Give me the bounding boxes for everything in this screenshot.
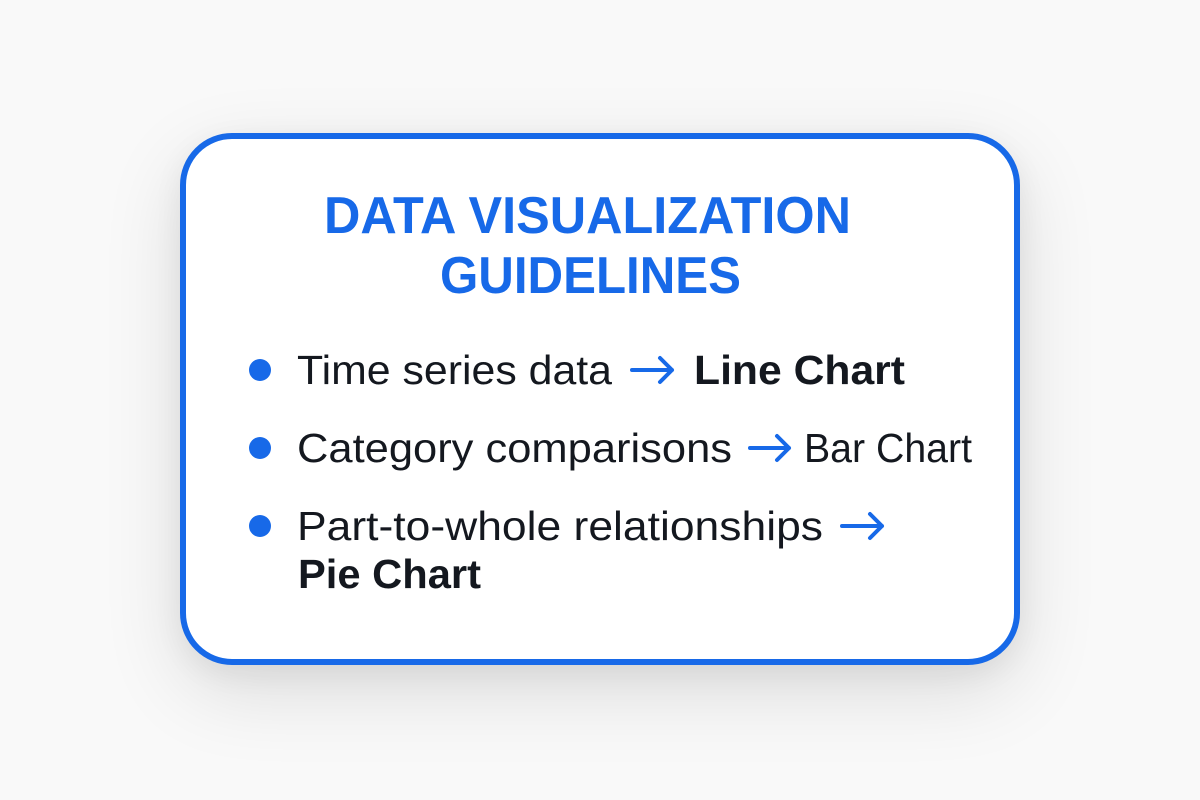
text: line chart: Line Chart	[694, 347, 905, 393]
title: GUIDELINES	[440, 247, 741, 305]
list item: part-to-whole	[249, 503, 882, 597]
text: part-to-whole relationships: Part-to-whole relationships	[297, 503, 823, 549]
panel: guidelines card	[180, 133, 1020, 665]
text: category comparisons: Category comparisons	[297, 425, 732, 471]
icon: bullet 2	[249, 437, 271, 459]
icon: bullet 1	[249, 359, 271, 381]
arrow 1	[632, 358, 672, 382]
list item: time series	[249, 347, 905, 393]
list item: category comparisons	[249, 425, 973, 471]
text: pie chart: Pie Chart	[298, 551, 481, 597]
text: bar chart: Bar Chart	[804, 425, 973, 471]
arrow 3	[842, 514, 882, 538]
arrow 2	[750, 436, 789, 460]
icon: bullet 3	[249, 515, 271, 537]
title: DATA VISUALIZATION	[324, 187, 851, 245]
text: time series data: Time series data	[297, 347, 612, 393]
title	[324, 187, 851, 305]
